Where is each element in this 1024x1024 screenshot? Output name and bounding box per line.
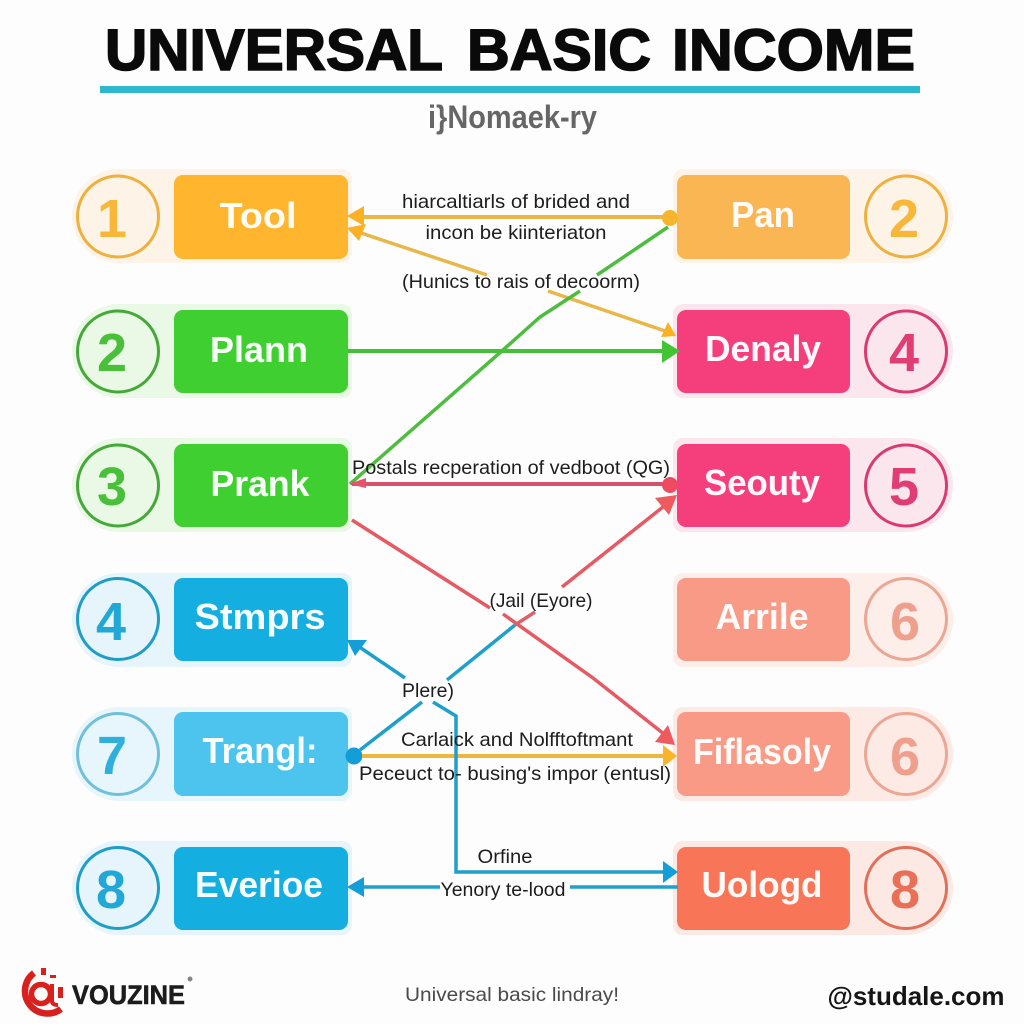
title: BASIC (467, 18, 651, 83)
row 4 left: Stmprs: 4 (96, 592, 126, 652)
annotation: top arrow upper: hiarcaltiarls of brided and (402, 191, 630, 213)
annotation: crossing arrows: (Jail (Eyore) (490, 590, 592, 612)
footer handle: @studale.com (828, 981, 1004, 1011)
row 3 left: Prank: Prank (210, 463, 310, 504)
row 3 left: Prank (72, 438, 352, 532)
arrow: Plann to Denaly (348, 340, 680, 363)
row 6 right: Uologd: 8 (890, 860, 920, 920)
annotation: Prank to Seouty: Postals recperation of vedboot (QG) (352, 457, 670, 479)
annotation: top arrow lower: incon be kiinteriaton (426, 222, 606, 244)
logo: VOUZINE (25, 968, 193, 1014)
title: INCOME (672, 18, 915, 83)
row 6 right: Uologd: Uologd (702, 864, 822, 905)
row 3 left: Prank: 3 (97, 457, 127, 517)
arrow: Prank to Fiflasoly (352, 520, 675, 745)
row 3 right: Seouty (673, 438, 953, 532)
annotation: Trangl lower: Peceuct to- busing's impor (entusl) (359, 763, 671, 785)
row 1 right: Pan: 2 (889, 189, 919, 249)
arrow: Trangl to Fiflasoly (362, 745, 677, 767)
row 2 right: Denaly: 4 (889, 323, 919, 383)
title underline (100, 86, 920, 93)
arrow: Pan to Tool (347, 206, 678, 226)
row 3 right: Seouty: Seouty (704, 462, 820, 503)
arrow: elbow to Uologd (433, 702, 678, 883)
row 5 right: Fiflasoly: 6 (890, 727, 920, 787)
arrow: to Stmprs (347, 640, 405, 678)
row 2 right: Denaly (673, 304, 953, 398)
title (105, 18, 915, 83)
annotation: Yenory: Yenory te-lood (440, 879, 566, 901)
annotation: diagonal arrows: (Hunics to rais of decoorm) (402, 271, 640, 293)
row 5 right: Fiflasoly: Fiflasoly (693, 731, 831, 772)
row 1 left: Tool (72, 169, 352, 263)
row 5 left: Trangl: 7 (97, 726, 127, 786)
row 2 left: Plann: 2 (97, 323, 127, 383)
row 6 left: Everioe: Everioe (195, 864, 323, 905)
arrow: Uologd to Everioe (347, 877, 678, 897)
arrow: Tool to Denaly, lower part (548, 291, 676, 337)
footer caption: Universal basic lindray! (405, 984, 619, 1006)
row 4 right: Arrile: 6 (890, 592, 920, 652)
row 4 left: Stmprs: Stmprs (194, 596, 326, 637)
row 5 left: Trangl (72, 707, 352, 801)
row 1 left: Tool: Tool (220, 195, 296, 236)
row 2 left: Plann (72, 304, 352, 398)
subtitle: i}Nomaek-ry (428, 99, 597, 135)
row 2 left: Plann: Plann (210, 329, 308, 370)
row 3 right: Seouty: 5 (889, 457, 919, 517)
row 4 left: Stmprs (72, 573, 352, 667)
row 6 left: Everioe (72, 841, 352, 935)
row 6 left: Everioe: 8 (96, 860, 126, 920)
arrow: Trangl to Seouty (346, 495, 677, 764)
arrow: Prank to Pan (350, 227, 668, 484)
row 1 left: Tool: 1 (97, 189, 127, 249)
arrow: Denaly to Tool, upper part (347, 224, 487, 275)
annotation: Trangl upper: Carlaick and Nolfftoftmant (401, 729, 634, 751)
arrow: Prank to Seouty (349, 477, 678, 493)
row 1 right: Pan (673, 169, 953, 263)
row 2 right: Denaly: Denaly (705, 328, 821, 369)
row 5 left: Trangl: Trangl: (202, 730, 318, 771)
row 6 right: Uologd (673, 841, 953, 935)
title: UNIVERSAL (105, 18, 443, 83)
row 4 right: Arrile: Arrile (716, 596, 808, 637)
row 1 right: Pan: Pan (731, 194, 795, 235)
row 5 right: Fiflasoly (673, 707, 953, 801)
logo: VOUZINE: VOUZINE (72, 980, 185, 1010)
annotation: Plere: Plere) (402, 680, 454, 702)
annotation: Orfine: Orfine (478, 846, 532, 868)
row 4 right: Arrile (673, 573, 953, 667)
